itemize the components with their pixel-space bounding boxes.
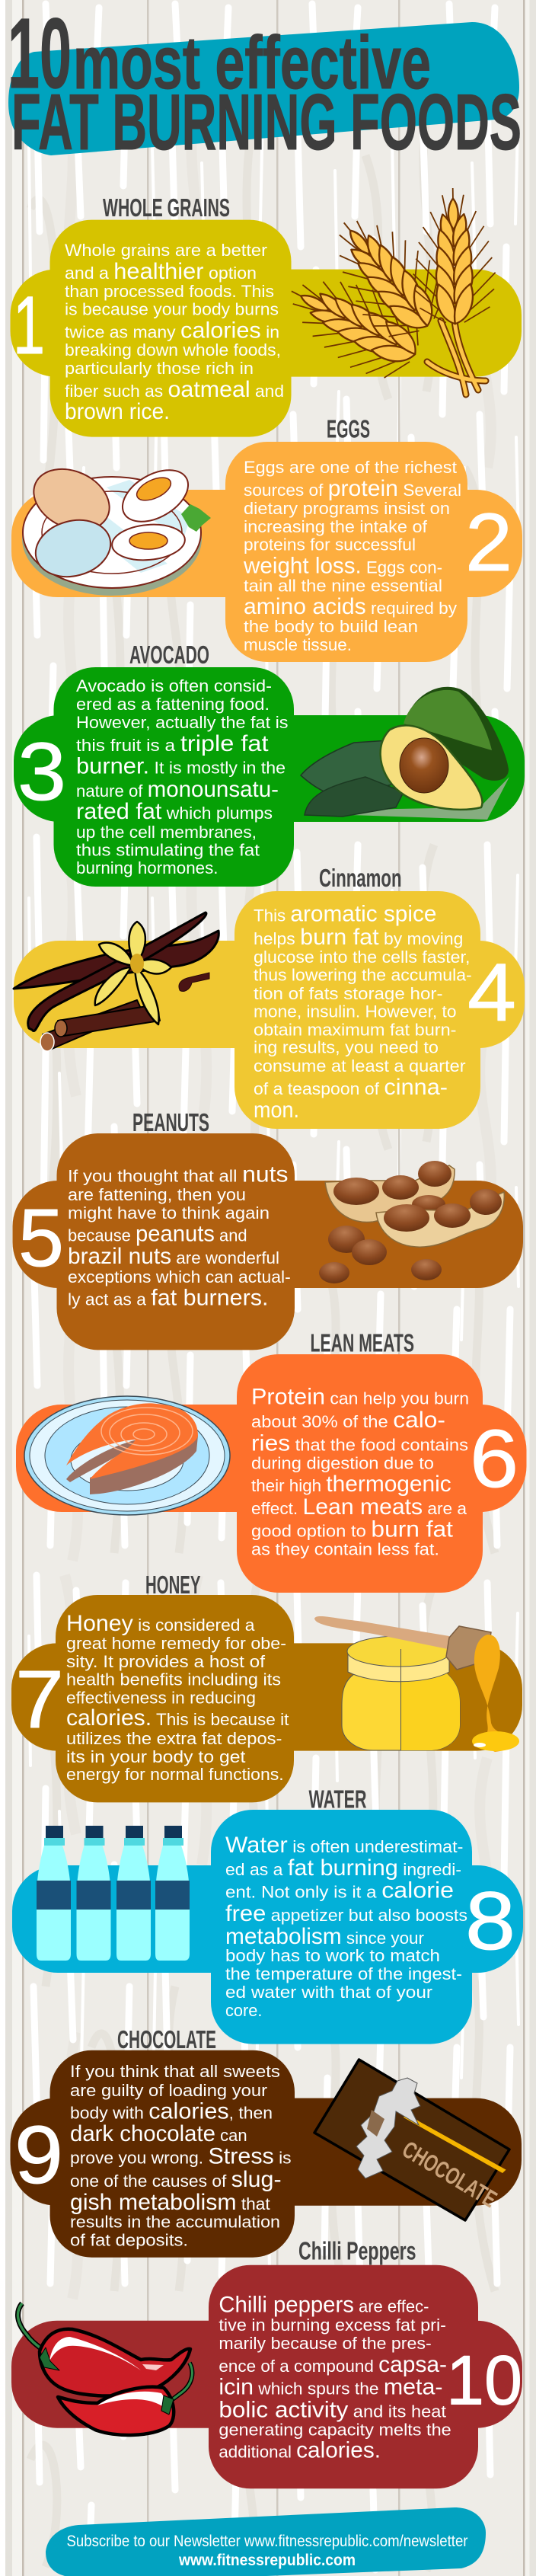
panel: eggs	[11, 414, 522, 662]
body text: dietary programs insist on	[244, 499, 450, 518]
card shape	[11, 220, 522, 437]
icon: eggs on plate	[22, 457, 211, 596]
body text: tain all the nine essential	[244, 576, 442, 596]
panel: chilli peppers	[11, 2237, 522, 2488]
body text: good option to burn fat	[251, 1517, 454, 1542]
body text: thus lowering the accumula-	[254, 966, 472, 985]
body text: its in your body to get	[66, 1747, 246, 1766]
body text: about 30% of the calo-	[251, 1408, 445, 1433]
body text: sources of protein Several	[244, 476, 461, 501]
body text	[219, 2293, 451, 2463]
body text: Protein can help you burn	[251, 1385, 469, 1410]
body text: amino acids required by	[244, 594, 458, 619]
body text: fiber such as oatmeal and	[65, 377, 284, 402]
body text: are fattening, then you	[68, 1185, 246, 1204]
body text: as they contain less fat.	[251, 1540, 439, 1558]
number: 6	[470, 1412, 518, 1504]
panel: avocado	[14, 641, 525, 887]
body text: additional calories.	[219, 2438, 381, 2463]
body text: results in the accumulation	[70, 2212, 280, 2231]
body text: might have to think again	[68, 1203, 270, 1222]
body text: ence of a compound capsa-	[219, 2352, 447, 2377]
body text: this fruit is a triple fat	[76, 731, 269, 756]
heading: AVOCADO	[129, 641, 209, 669]
body text: utilizes the extra fat depos-	[66, 1729, 282, 1748]
title blob	[8, 22, 519, 155]
body text: Whole grains are a better	[65, 241, 268, 260]
body text: body has to work to match	[225, 1946, 440, 1965]
newsletter line: Subscribe to our Newsletter www.fitnessrepublic.com/newsletter	[67, 2533, 467, 2550]
body text: helps burn fat by moving	[254, 925, 463, 950]
panel: water	[12, 1785, 523, 2044]
body text: burner. It is mostly in the	[76, 754, 286, 779]
body text: dark chocolate can	[70, 2121, 247, 2146]
title: 10	[8, 0, 72, 109]
body text: increasing the intake of	[244, 517, 428, 536]
body text: This aromatic spice	[254, 902, 436, 927]
body text: particularly those rich in	[65, 359, 254, 378]
icon: honey jar	[314, 1616, 519, 1752]
body text: exceptions which can actual-	[68, 1267, 291, 1286]
body text	[243, 458, 461, 654]
body text: effect. Lean meats are a	[251, 1494, 467, 1520]
body text: nature of monounsatu-	[76, 777, 279, 802]
body text: ed water with that of your	[225, 1983, 433, 2002]
heading: CHOCOLATE	[117, 2025, 216, 2053]
heading: Chilli Peppers	[298, 2237, 416, 2265]
body text	[66, 1611, 289, 1784]
heading: EGGS	[327, 414, 370, 443]
body text: the temperature of the ingest-	[225, 1964, 462, 1983]
body text: sity. It provides a host of	[66, 1652, 266, 1671]
icon: vanilla and cinnamon	[14, 912, 219, 1051]
number: 5	[18, 1191, 64, 1283]
body text: calories. This is because it	[66, 1705, 289, 1731]
icon: salmon on plate	[24, 1396, 230, 1515]
body text	[68, 1162, 291, 1311]
body text	[76, 676, 288, 877]
body text: of a teaspoon of cinna-	[254, 1075, 448, 1100]
body text: Eggs are one of the richest	[244, 458, 458, 477]
panel: peanuts	[12, 1108, 523, 1350]
heading: LEAN MEATS	[311, 1329, 414, 1357]
icon: avocado	[301, 687, 509, 820]
body text: ent. Not only is it a calorie	[225, 1878, 454, 1903]
body text: up the cell membranes,	[76, 823, 257, 842]
body text: free appetizer but also boosts	[225, 1901, 467, 1926]
body text: ing results, you need to	[254, 1038, 439, 1057]
body text: and a healthier option	[65, 259, 257, 284]
body text: Water is often underestimat-	[225, 1833, 463, 1858]
body text: muscle tissue.	[244, 635, 352, 654]
body text	[70, 2062, 292, 2249]
footer banner	[46, 2507, 486, 2576]
heading: Cinnamon	[319, 864, 402, 892]
number: 4	[467, 946, 516, 1038]
body text: Chilli peppers are effec-	[219, 2293, 429, 2318]
number: 10	[446, 2342, 522, 2420]
body text: their high thermogenic	[251, 1472, 451, 1497]
title	[8, 0, 522, 167]
panel: cinnamon	[14, 864, 525, 1129]
body text: burning hormones.	[76, 858, 218, 877]
body text: ly act as a fat burners.	[68, 1286, 268, 1311]
body text: because peanuts and	[68, 1221, 247, 1246]
card shape	[12, 1810, 523, 2044]
panel: lean meats	[16, 1329, 527, 1593]
body text: breaking down whole foods,	[65, 340, 281, 360]
body text: is because your body burns	[65, 300, 279, 318]
body text: the body to build lean	[244, 617, 418, 636]
body text	[251, 1385, 469, 1558]
body text: one of the causes of slug-	[70, 2167, 282, 2192]
body text: health benefits including its	[66, 1670, 281, 1689]
body text	[65, 241, 284, 424]
body text: rated fat which plumps	[76, 799, 273, 824]
icon: chocolate bar	[314, 2060, 509, 2220]
body text: energy for normal functions.	[66, 1765, 284, 1784]
body text: thus stimulating the fat	[76, 841, 260, 860]
body text: of fat deposits.	[70, 2230, 188, 2249]
body text: marily because of the pres-	[219, 2334, 432, 2353]
body text: bolic activity and its heat	[219, 2397, 447, 2422]
card shape	[11, 2050, 522, 2258]
body text: tive in burning excess fat pri-	[219, 2316, 446, 2335]
body text: brown rice.	[65, 399, 170, 424]
body text: great home remedy for obe-	[66, 1634, 286, 1653]
panel: chocolate	[11, 2025, 522, 2258]
body text: ries that the food contains	[251, 1430, 468, 1456]
body text: If you thought that all nuts	[68, 1162, 288, 1187]
heading: HONEY	[145, 1571, 201, 1599]
footer blob	[46, 2507, 486, 2576]
number: 2	[465, 496, 512, 588]
body text: If you think that all sweets	[70, 2062, 280, 2081]
body text	[225, 1833, 467, 2020]
card shape	[14, 667, 525, 887]
body text: core.	[225, 2001, 262, 2020]
body text: are guilty of loading your	[70, 2081, 268, 2100]
body text: consume at least a quarter	[254, 1056, 466, 1075]
body text: effectiveness in reducing	[66, 1689, 256, 1708]
icon: chilli peppers	[18, 2303, 192, 2435]
body text: icin which spurs the meta-	[219, 2374, 443, 2399]
body text: brazil nuts are wonderful	[68, 1244, 279, 1269]
number: 9	[14, 2108, 63, 2200]
body text: than processed foods. This	[65, 282, 274, 301]
body text: proteins for successful	[244, 535, 416, 555]
body text: during digestion due to	[251, 1454, 434, 1473]
icon: peanuts	[319, 1161, 504, 1283]
body text: tion of fats storage hor-	[254, 984, 443, 1003]
body text: metabolism since your	[225, 1924, 424, 1949]
icon: wheat	[273, 187, 496, 395]
body text: glucose into the cells faster,	[254, 948, 470, 967]
body text: body with calories, then	[70, 2098, 273, 2124]
body text: generating capacity melts the	[219, 2421, 451, 2440]
number: 1	[13, 279, 45, 371]
icon: chocolate bar: CHOCOLATE	[397, 2136, 502, 2213]
header banner	[8, 0, 522, 167]
panel: honey	[11, 1571, 522, 1802]
body text: However, actually the fat is	[76, 713, 288, 732]
body text: twice as many calories in	[65, 318, 279, 343]
website line: www.fitnessrepublic.com	[178, 2552, 356, 2569]
body text: mon.	[254, 1098, 299, 1123]
card shape	[11, 1595, 522, 1802]
body text: gish metabolism that	[70, 2190, 270, 2215]
panel: whole grains	[11, 187, 522, 437]
card shape	[12, 1133, 523, 1350]
body text: Avocado is often consid-	[76, 676, 272, 695]
body text: mone, insulin. However, to	[254, 1002, 457, 1021]
number: 7	[15, 1653, 64, 1745]
body text: ed as a fat burning ingredi-	[225, 1855, 461, 1881]
card shape	[11, 442, 522, 662]
body text: weight loss. Eggs con-	[243, 553, 442, 578]
body text: ered as a fattening food.	[76, 695, 270, 714]
body text: obtain maximum fat burn-	[254, 1021, 457, 1040]
number: 8	[465, 1874, 515, 1967]
icon: water bottles	[37, 1826, 190, 1961]
card shape	[11, 2265, 522, 2488]
heading: WHOLE GRAINS	[103, 193, 230, 222]
heading: PEANUTS	[132, 1108, 209, 1136]
number: 3	[18, 725, 66, 817]
body text: Honey is considered a	[66, 1611, 255, 1636]
card shape	[16, 1354, 527, 1593]
body text	[254, 902, 472, 1123]
heading: WATER	[309, 1785, 367, 1814]
card shape	[14, 891, 525, 1129]
body text: prove you wrong. Stress is	[70, 2144, 292, 2169]
